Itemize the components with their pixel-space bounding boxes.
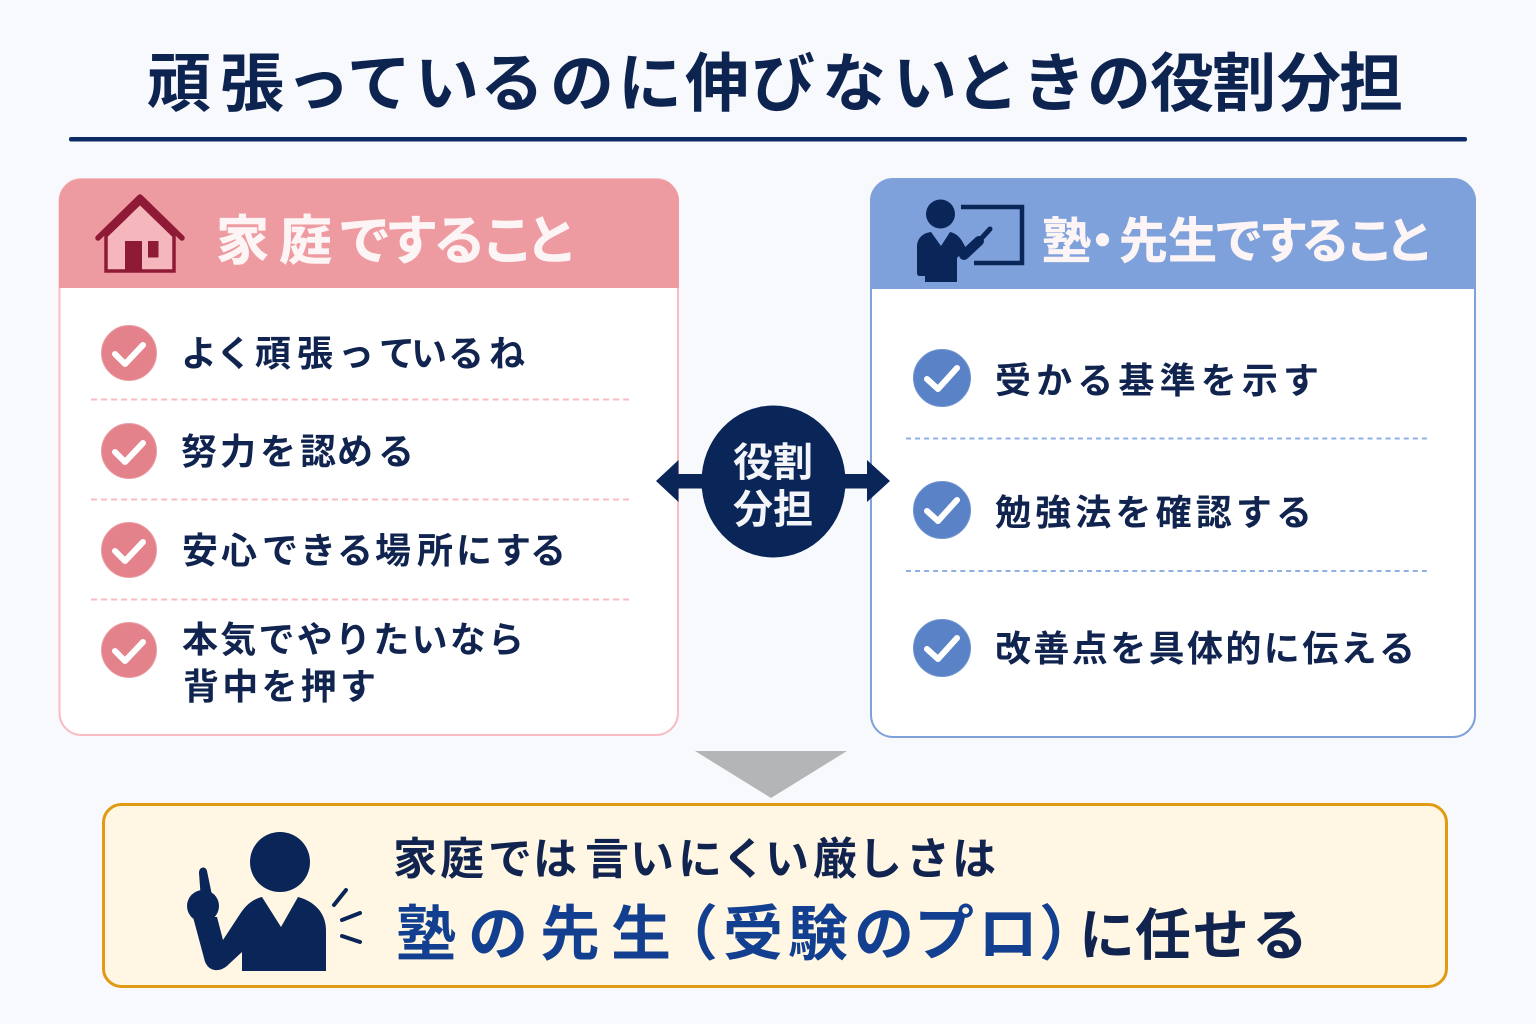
- icon: house: [98, 197, 182, 271]
- item: home 4: 本気でやりたいなら: [182, 619, 524, 660]
- text: conclusion line 2: に任せる: [1079, 904, 1308, 967]
- panel: juku teacher: [870, 179, 1476, 737]
- heading: juku teacher: 塾・先生ですること: [1042, 215, 1434, 269]
- item: juku 1: 受かる基準を示す: [995, 360, 1319, 401]
- item: juku 1: [914, 350, 1319, 406]
- heading: home: 家庭ですること: [216, 212, 578, 271]
- item: home 3: 安心できる場所にする: [182, 530, 566, 571]
- item: juku 2: [914, 482, 1312, 538]
- item: home 1: よく頑張っているね: [181, 333, 525, 374]
- arrow: double-headed: [656, 460, 890, 502]
- panel header: home: [59, 179, 679, 288]
- item: home 4: [102, 619, 524, 707]
- item: juku 2: 勉強法を確認する: [995, 492, 1312, 533]
- center badge: role sharing: [656, 406, 890, 558]
- item: home 4: 背中を押す: [183, 666, 376, 707]
- center badge: role sharing: 分担: [733, 488, 813, 532]
- icon: person pointing up: [187, 832, 360, 971]
- text: conclusion line 1: 家庭では言いにくい厳しさは: [393, 835, 996, 884]
- item: juku 3: [914, 620, 1415, 676]
- item: home 2: 努力を認める: [181, 431, 414, 472]
- item: home 3: [102, 522, 566, 578]
- center badge: role sharing: 役割: [733, 441, 813, 485]
- title: 頑張っているのに伸びないときの役割分担: [147, 48, 1403, 120]
- text: conclusion line 2: 塾の先生（受験のプロ）: [396, 901, 1099, 968]
- panel: conclusion: [104, 804, 1446, 986]
- item: juku 3: 改善点を具体的に伝える: [995, 628, 1415, 669]
- panel header: juku teacher: [870, 179, 1476, 289]
- item: home 2: [102, 424, 414, 478]
- item: home 1: [102, 326, 525, 380]
- panel: home: [59, 179, 679, 735]
- arrow: down triangle: [695, 751, 847, 798]
- icon: teacher at board: [917, 200, 1022, 282]
